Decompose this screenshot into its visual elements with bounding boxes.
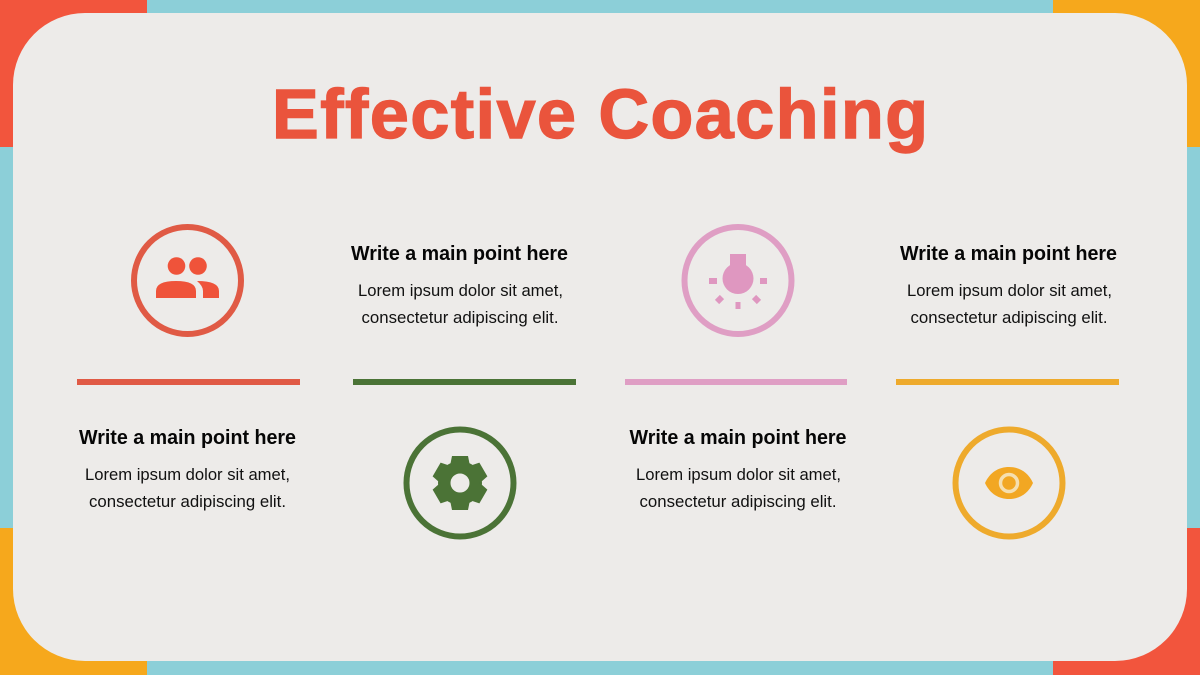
text block: point 3: consectetur adipiscing elit.: [640, 493, 836, 511]
text block: point 1: [79, 426, 296, 511]
column 3: light bulb: [625, 227, 847, 511]
text block: point 1: Lorem ipsum dolor sit amet,: [85, 466, 290, 484]
icon: people: [134, 227, 241, 334]
title: Effective Coaching: [272, 75, 928, 153]
divider: green: [353, 379, 576, 385]
text block: point 2: consectetur adipiscing elit.: [362, 309, 558, 327]
divider: red: [77, 379, 300, 385]
icon: eye: [956, 430, 1062, 536]
text block: point 1: consectetur adipiscing elit.: [89, 493, 286, 511]
icon: light bulb: [684, 227, 792, 334]
column 2: gear: [351, 242, 576, 536]
text block: point 3: [630, 426, 846, 511]
text block: point 4: [900, 242, 1117, 327]
icon: gear: [406, 430, 514, 536]
text block: point 2: [351, 242, 568, 327]
text block: point 4: consectetur adipiscing elit.: [910, 309, 1108, 327]
divider: pink: [625, 379, 847, 385]
text block: point 4: Write a main point here: [900, 242, 1117, 265]
text block: point 2: Write a main point here: [351, 242, 568, 265]
column 4: eye: [896, 242, 1119, 536]
text block: point 2: Lorem ipsum dolor sit amet,: [358, 282, 563, 300]
text block: point 3: Lorem ipsum dolor sit amet,: [636, 466, 841, 484]
text block: point 1: Write a main point here: [79, 426, 296, 449]
column 1: people: [77, 227, 300, 511]
divider: yellow: [896, 379, 1119, 385]
text block: point 4: Lorem ipsum dolor sit amet,: [907, 282, 1112, 300]
text block: point 3: Write a main point here: [630, 426, 846, 449]
